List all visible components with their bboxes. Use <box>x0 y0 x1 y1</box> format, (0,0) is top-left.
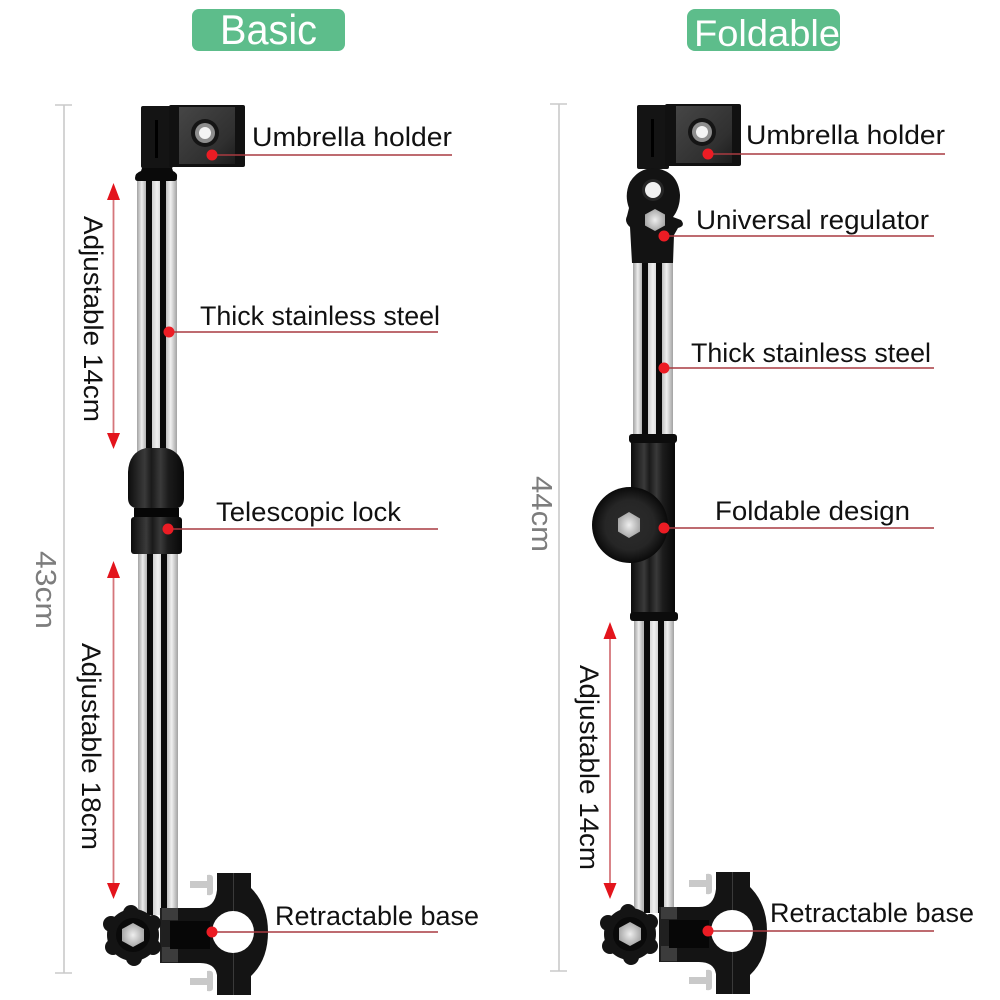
leader: umbrella holder (foldable) <box>702 120 945 160</box>
lower tube <box>138 550 178 915</box>
leader: telescopic lock: Telescopic lock <box>216 497 402 527</box>
product: basic umbrella arm <box>103 105 268 995</box>
arrow: adjustable 18cm on basic <box>76 561 120 899</box>
leader: foldable design: Foldable design <box>715 496 910 526</box>
dimension: 43cm total height <box>29 105 72 973</box>
arrow: adjustable 14cm on basic <box>78 183 120 449</box>
upper tube <box>137 178 177 453</box>
foldable sleeve <box>592 434 678 621</box>
dimension: 43cm total height: 43cm <box>29 551 61 629</box>
dimension: 44cm total height <box>525 104 567 971</box>
lower tube <box>634 618 674 913</box>
leader: umbrella holder (basic) <box>206 122 452 160</box>
leader: telescopic lock <box>162 497 438 534</box>
leader: umbrella holder (foldable): Umbrella holder <box>746 120 945 150</box>
arrow: adjustable 14cm on basic: Adjustable 14cm <box>78 216 108 422</box>
leader: retractable base (foldable) <box>702 898 974 936</box>
retractable base clamp <box>600 872 767 994</box>
badge: Basic: Basic <box>220 6 317 53</box>
umbrella holder clamp <box>135 105 245 181</box>
arrow: adjustable 18cm on basic: Adjustable 18cm <box>76 643 106 850</box>
leader: universal regulator <box>658 205 934 242</box>
umbrella holder clamp <box>637 104 741 169</box>
leader: umbrella holder (basic): Umbrella holder <box>252 122 452 152</box>
retractable base clamp <box>103 873 268 995</box>
arrow: adjustable 14cm on foldable: Adjustable 14cm <box>574 665 604 870</box>
leader: thick stainless steel (foldable): Thick stainless steel <box>691 338 931 368</box>
arrow: adjustable 14cm on foldable <box>574 622 616 899</box>
leader: retractable base (basic): Retractable base <box>275 901 479 931</box>
leader: foldable design <box>658 496 934 534</box>
badge: Foldable: Foldable <box>694 13 840 54</box>
upper tube <box>633 262 673 438</box>
product: foldable umbrella arm <box>592 104 767 994</box>
leader: retractable base (basic) <box>206 901 479 938</box>
badge: Basic <box>192 6 345 53</box>
leader: universal regulator: Universal regulator <box>696 205 929 235</box>
leader: thick stainless steel (basic): Thick stainless steel <box>200 301 440 331</box>
leader: retractable base (foldable): Retractable base <box>770 898 974 928</box>
universal regulator joint <box>626 168 683 263</box>
telescopic lock <box>128 448 184 554</box>
dimension: 44cm total height: 44cm <box>525 476 557 552</box>
